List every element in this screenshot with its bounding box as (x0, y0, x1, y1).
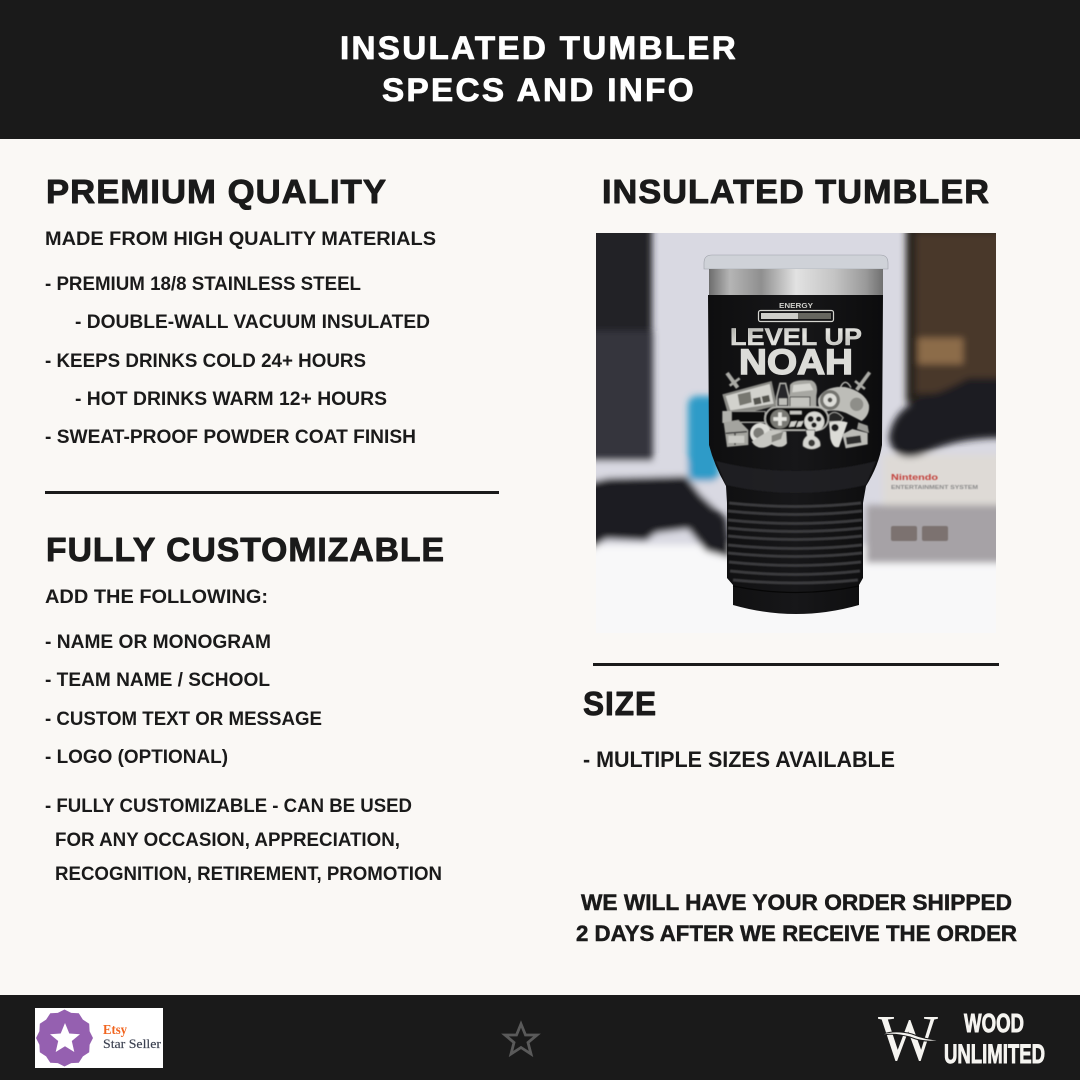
shipping note: WE WILL HAVE YOUR ORDER SHIPPED (581, 890, 1012, 915)
intro text: materials: MADE FROM HIGH QUALITY MATERIALS (45, 228, 436, 250)
size note: - MULTIPLE SIZES AVAILABLE (583, 747, 895, 772)
customization list: - NAME OR MONOGRAM (45, 631, 271, 653)
footer band (0, 995, 1080, 1080)
engraving: energy bar (758, 303, 834, 322)
feature list: - PREMIUM 18/8 STAINLESS STEEL (45, 273, 361, 295)
etsy star seller badge (35, 1008, 163, 1068)
badge label (103, 1022, 162, 1051)
title (340, 30, 738, 108)
occasions text: RECOGNITION, RETIREMENT, PROMOTION (55, 863, 442, 885)
engraving: game consoles artwork (722, 372, 870, 449)
tumbler taper highlight (716, 461, 876, 493)
tumbler body (708, 295, 883, 614)
engraving: noah: NOAH (739, 343, 853, 382)
badge label: Etsy (103, 1022, 127, 1037)
engraving: level up: LEVEL UP (730, 324, 862, 351)
heading: insulated tumbler: INSULATED TUMBLER (602, 174, 990, 211)
logo wordmark (944, 1008, 1045, 1069)
title: INSULATED TUMBLER (340, 30, 738, 66)
feature list: - KEEPS DRINKS COLD 24+ HOURS (45, 350, 366, 372)
feature list: - HOT DRINKS WARM 12+ HOURS (75, 388, 387, 410)
header band (0, 0, 1080, 139)
wood unlimited logo (878, 1002, 1045, 1075)
badge label: Star Seller (103, 1037, 162, 1051)
tumbler base seam (733, 586, 859, 592)
NES console label (891, 473, 978, 541)
panel: size (583, 686, 895, 772)
customization list: - CUSTOM TEXT OR MESSAGE (45, 708, 322, 730)
tumbler lid (704, 255, 888, 269)
customization list: - LOGO (OPTIONAL) (45, 746, 228, 768)
shipping note (576, 890, 1017, 946)
occasions text: - FULLY CUSTOMIZABLE - CAN BE USED (45, 795, 412, 817)
occasions text: FOR ANY OCCASION, APPRECIATION, (55, 829, 400, 851)
logo wordmark: WOOD (964, 1008, 1024, 1038)
photo background scene (586, 223, 1006, 645)
NES console label: Nintendo (891, 473, 938, 482)
tumbler ribs (728, 503, 862, 583)
heading: fully customizable: FULLY CUSTOMIZABLE (46, 532, 445, 569)
customization list: - TEAM NAME / SCHOOL (45, 669, 270, 691)
heading: size: SIZE (583, 686, 657, 723)
logo mark: W with swoosh: W (878, 1002, 939, 1075)
feature list: - SWEAT-PROOF POWDER COAT FINISH (45, 426, 416, 448)
occasions text (45, 795, 442, 885)
intro text: add the following: ADD THE FOLLOWING: (45, 586, 268, 608)
feature list (45, 273, 430, 448)
tumbler steel band (709, 269, 883, 295)
feature list: - DOUBLE-WALL VACUUM INSULATED (75, 311, 430, 333)
icon: purple scalloped star (36, 1010, 93, 1066)
title: SPECS AND INFO (382, 72, 696, 108)
product photo: black engraved tumbler (596, 233, 996, 614)
customization list (45, 631, 322, 768)
heading: premium quality: PREMIUM QUALITY (46, 174, 387, 211)
panel: premium quality (45, 174, 436, 448)
panel: fully customizable (45, 532, 445, 885)
NES console label: ENTERTAINMENT SYSTEM (891, 485, 978, 491)
shipping note: 2 DAYS AFTER WE RECEIVE THE ORDER (576, 921, 1017, 946)
icon: outlined star (505, 1024, 537, 1054)
tumbler (704, 255, 888, 614)
engraving: energy bar: ENERGY (779, 303, 813, 310)
